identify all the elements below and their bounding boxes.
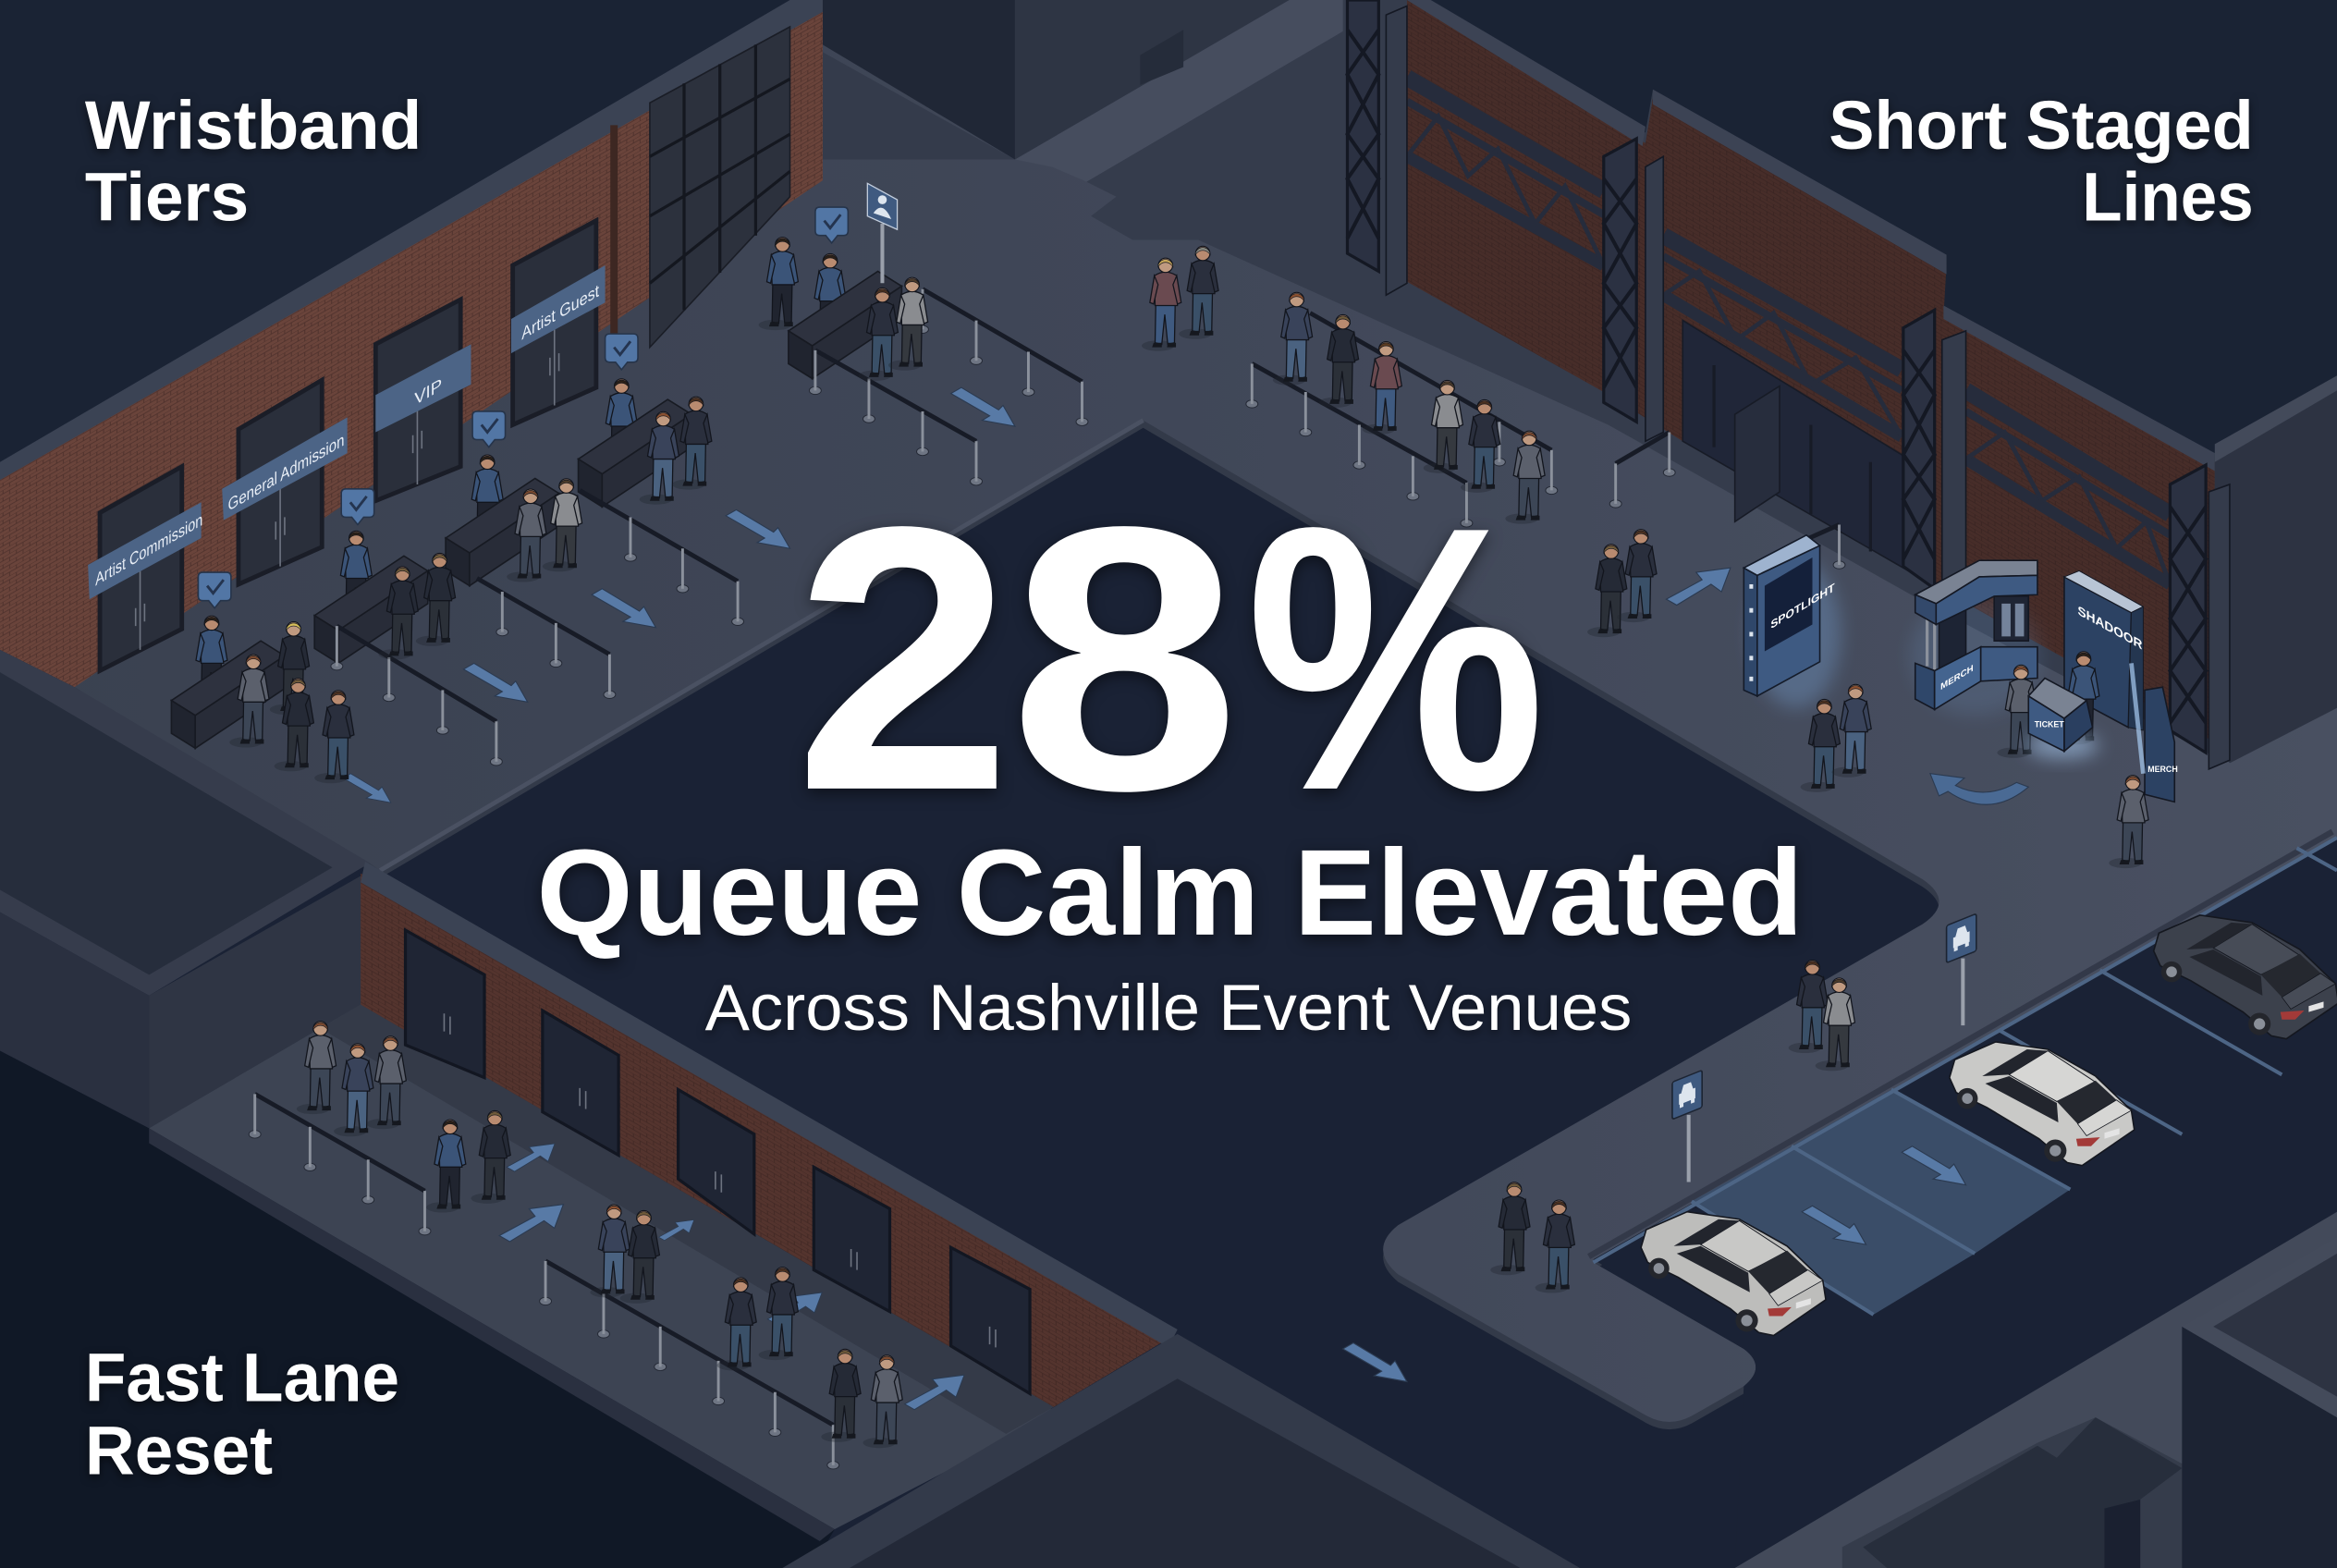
door signs: Artist Commission <box>95 510 202 590</box>
people: short staged lines queue <box>1142 246 1657 637</box>
building: lower left block <box>0 650 370 1128</box>
panel: wristband venue brick wall <box>0 12 823 687</box>
check-in desks <box>171 271 901 748</box>
curved return arrow <box>1930 774 2028 804</box>
panel: fast lane base <box>0 1051 835 1568</box>
stanchions: short staged lines <box>1246 313 1845 569</box>
panel: fast lane brick wall <box>361 862 1178 1407</box>
stage door banner <box>2064 570 2143 730</box>
big statistic: % <box>1246 449 1546 869</box>
fast lane wall shadow <box>321 1005 1054 1434</box>
door staff behind desks <box>188 238 846 709</box>
heading: fast lane reset: Reset <box>85 1412 273 1488</box>
people at kiosk <box>1997 652 2099 758</box>
building: right side block <box>2215 375 2337 763</box>
panel: parking lot <box>1589 832 2337 1568</box>
side sponsor stand <box>2132 663 2178 802</box>
check mark bubbles <box>198 207 848 608</box>
highlighted bays <box>1692 1089 2070 1315</box>
concierge desk <box>2027 679 2098 759</box>
parking arrows <box>1343 1146 1966 1381</box>
floor: light strip beside top building <box>1015 0 1343 182</box>
cars <box>1641 915 2337 1336</box>
fast lane doors <box>406 930 1030 1393</box>
heading: short staged lines: Short Staged <box>1829 87 2254 164</box>
panel: fast lane floor <box>149 1005 1058 1529</box>
curb edge strip <box>1589 832 2332 1256</box>
merch kiosk: MERCH <box>1940 663 1974 692</box>
building: top centre block <box>823 0 1290 160</box>
big statistic: 8 <box>1009 449 1240 869</box>
stage doors <box>1682 321 1914 574</box>
door signs: Artist Guest <box>521 281 599 344</box>
big statistic: 2 <box>794 449 1012 869</box>
truss beams <box>1407 78 2170 584</box>
fast lane floor rim <box>149 1128 835 1541</box>
curb highlight along central plaza <box>380 421 1144 871</box>
panel: wristband tiers roof <box>0 0 789 462</box>
door signs: VIP <box>414 375 442 410</box>
flow arrows: wristband tiers <box>343 387 1015 802</box>
parking signs <box>1672 913 1976 1182</box>
panel: short staged brick walls <box>1407 0 2215 742</box>
heading: fast lane reset: Fast Lane <box>85 1339 399 1415</box>
queue stanchions: wristband tiers <box>331 289 1088 766</box>
side sponsor stand: MERCH <box>2147 765 2178 774</box>
fast lane door handles <box>444 1013 996 1347</box>
heading: wristband tiers: Wristband <box>85 87 422 164</box>
door signs: General Admission <box>228 431 344 516</box>
stanchions: fast lane <box>249 1094 839 1469</box>
heading: wristband tiers: Tiers <box>85 159 249 236</box>
floor: shadow cast near right wall <box>1086 0 2337 760</box>
floor: shadow of top building <box>823 52 1015 160</box>
truss towers <box>1347 0 2230 769</box>
glass facade <box>614 27 789 358</box>
door signs <box>88 265 606 599</box>
flow arrows: fast lane <box>499 1144 964 1410</box>
icon: staff sign on post <box>867 183 898 283</box>
building: bottom centre roof <box>782 1334 1580 1568</box>
subtitle: Across Nashville Event Venues <box>705 972 1632 1045</box>
people: wristband tiers queues <box>229 277 928 783</box>
title: Queue Calm Elevated <box>536 825 1804 962</box>
panel: short staged lines roof <box>1409 0 2337 453</box>
heading: short staged lines: Lines <box>2082 159 2254 236</box>
buildings: bottom right <box>1735 1212 2337 1568</box>
arrow: toward totem <box>1666 568 1731 606</box>
door seams and handles <box>136 316 559 650</box>
people: plaza walkers <box>1490 684 2148 1293</box>
sponsor totem: SPOTLIGHT <box>1770 581 1834 631</box>
concierge desk: TICKET <box>2035 720 2064 729</box>
sponsor totem <box>1744 535 1841 708</box>
wall parapet <box>0 0 823 484</box>
people: fast lane <box>297 1022 902 1448</box>
stage door banner: SHADOOR <box>2077 604 2143 654</box>
doors <box>100 221 596 670</box>
parking bay lines <box>1593 838 2337 1315</box>
merch kiosk <box>1909 560 2040 716</box>
